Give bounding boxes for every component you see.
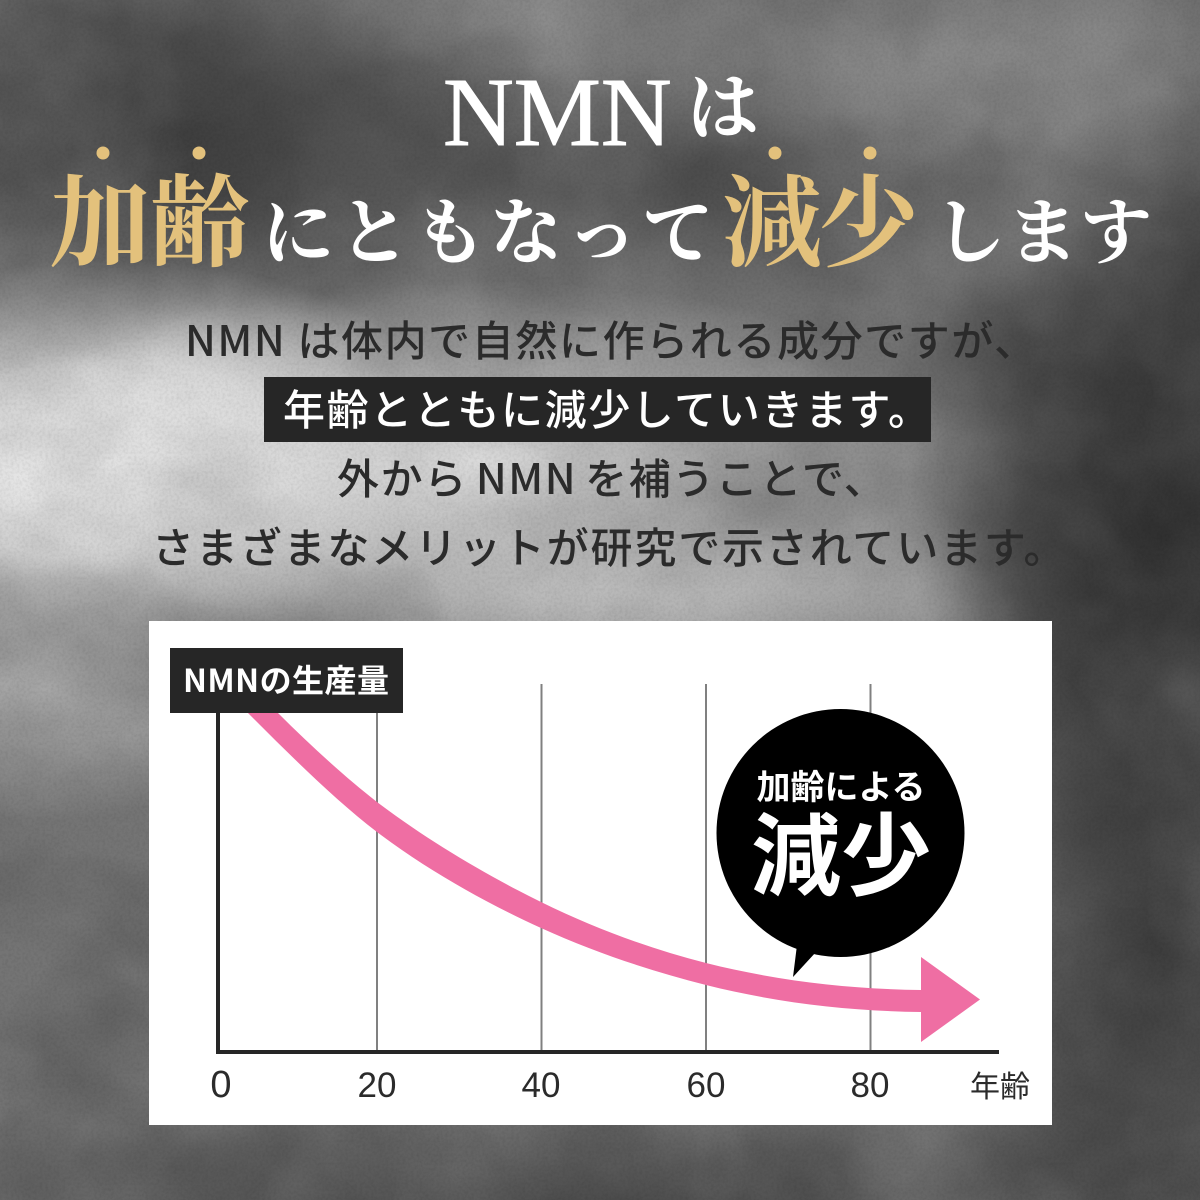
title line 1: NMN [443,59,672,167]
speech bubble: 加齢による [757,769,925,807]
title line 2 [50,146,1153,280]
title line 2: にともなって [262,194,718,274]
x-axis labels: 年齢 [970,1071,1030,1104]
x-axis labels: 20 [358,1066,396,1105]
title line 2: 減少 [722,169,916,280]
y-axis label: NMNの生産量 [183,656,389,702]
title line 1: は [687,69,759,149]
body line 1: NMN は体内で自然に作られる成分ですが、 [185,308,1038,369]
title line 2: 加齢 [50,169,250,280]
x-axis labels: 60 [687,1066,725,1105]
title line 2: します [934,194,1153,274]
highlighted line: 年齢とともに減少していきます。 [283,377,932,438]
speech bubble: 減少 [751,808,931,908]
grid lines [377,684,870,1050]
pink declining arrow [248,713,980,1042]
speech bubble [716,709,964,977]
body line 3: 外からNMNを補うことで、 [337,446,887,507]
x-axis labels: 80 [851,1066,889,1105]
y-axis label [170,648,403,713]
x-axis labels: 0 [210,1064,232,1106]
emphasis dots [96,146,876,160]
x-axis labels [210,1064,1030,1106]
chart panel [149,621,1052,1125]
x-axis labels: 40 [522,1066,560,1105]
body line 4: さまざまなメリットが研究で示されています。 [152,515,1067,576]
axes [216,700,999,1053]
